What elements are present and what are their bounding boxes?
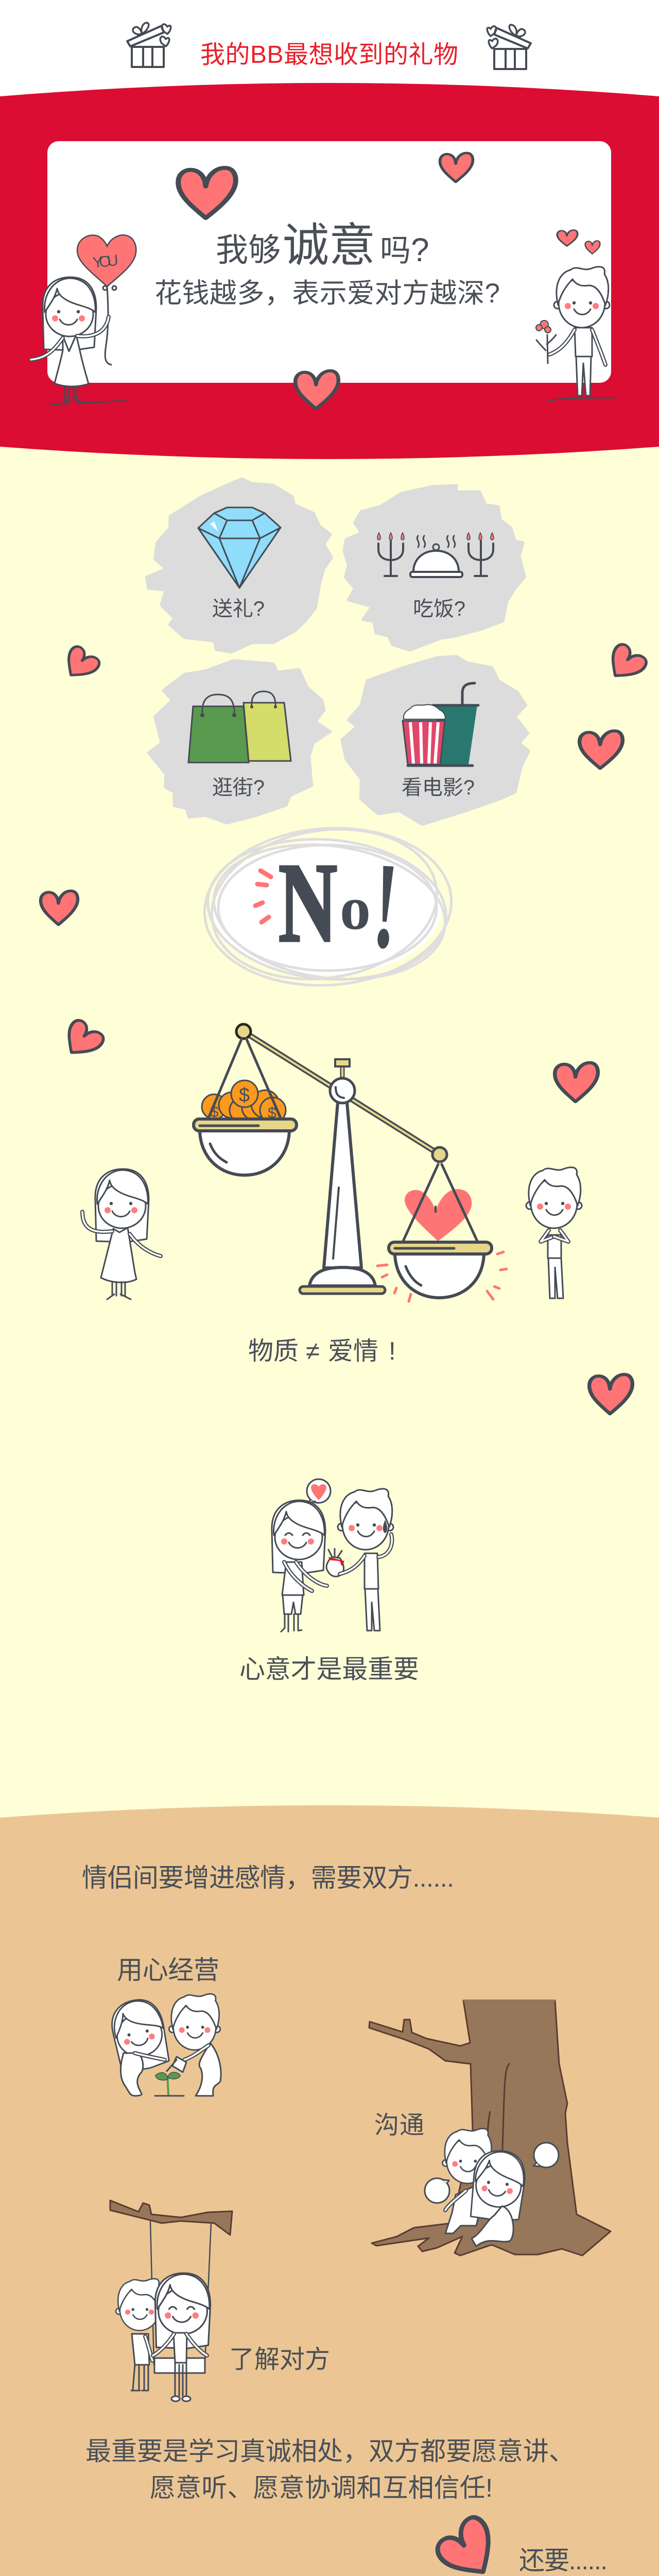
icon: bottom heart: [296, 371, 338, 409]
text: material not equal love: ≠: [306, 1337, 320, 1365]
figure: couple with gift: [272, 1479, 393, 1632]
text: couples need both sides: 情侣间要增进感情，需要双方......: [82, 1863, 454, 1892]
figure: girl with balloon: [31, 235, 136, 405]
label: movie: 看电影?: [402, 776, 475, 799]
label: communicate: 沟通: [374, 2112, 424, 2139]
icon: gift box left: [127, 23, 171, 67]
label: dinner: 吃饭?: [413, 598, 465, 620]
title: 我的BB最想收到的礼物: [200, 41, 458, 69]
figure: waving girl: [82, 1169, 161, 1299]
icon: gift box right: [487, 25, 531, 69]
figure: boy with hands on chest: [526, 1167, 582, 1298]
figure: girl with balloon: YOU: [92, 252, 119, 272]
text: material not equal love: !: [389, 1337, 396, 1365]
chart: balance scale: $: [239, 1084, 250, 1106]
text: the heart matters most: 心意才是最重要: [239, 1655, 419, 1684]
background: tan section: [0, 1805, 659, 2576]
scribbled circle with No!: o: [340, 874, 371, 942]
panel: dinner scribble: [344, 485, 525, 650]
figure: couple watering plant: [107, 1994, 221, 2096]
label: shopping: 逛街?: [212, 776, 265, 799]
scribbled circle with No!: [199, 814, 457, 995]
hero question: 我够: [216, 232, 281, 268]
label: gift: 送礼?: [212, 598, 265, 620]
label: also need: 还要......: [519, 2546, 608, 2575]
hero subtitle: 花钱越多，表示爱对方越深?: [154, 278, 500, 309]
heart on pan: [405, 1189, 472, 1241]
icon: shopping bags: [188, 691, 291, 762]
label: understand each other: 了解对方: [229, 2346, 330, 2374]
icon: heart beside also: [432, 2513, 506, 2576]
text: key message line 2: 愿意听、愿意协调和互相信任!: [150, 2473, 493, 2502]
hero question: 诚意: [283, 220, 375, 272]
background: red header band: [0, 83, 659, 459]
icon: small heart: [440, 153, 473, 182]
side hearts: scale section: [58, 1016, 632, 1414]
icon: big heart: [178, 168, 236, 218]
label: nurture: 用心经营: [117, 1956, 219, 1985]
figure: swing couple: [110, 2200, 232, 2401]
chart: balance scale: [194, 1024, 507, 1301]
side hearts: gift section: [41, 640, 649, 925]
chart: balance scale: $: [210, 1104, 219, 1121]
scribbled circle with No!: !: [369, 836, 402, 975]
icon: popcorn and drink: [403, 683, 478, 766]
panel: gift scribble: [147, 479, 332, 652]
icon: diamond: [198, 507, 281, 588]
text: material not equal love: 物质: [248, 1337, 299, 1365]
text: material not equal love: 爱情: [328, 1337, 378, 1365]
panel: movie scribble: [342, 656, 529, 824]
scribbled circle with No!: N: [279, 840, 337, 965]
hero question: 吗: [380, 233, 411, 268]
icon: candles and dinner: [377, 533, 494, 577]
hero question: ?: [411, 231, 429, 268]
figure: tree with couple: [369, 2001, 611, 2256]
figure: boy with rose: [536, 230, 616, 401]
background: pale yellow section: [0, 412, 659, 1855]
panel: white hero card: [47, 141, 611, 383]
coins: [202, 1080, 286, 1123]
panel: shopping scribble: [149, 660, 331, 823]
chart: balance scale: $: [268, 1105, 276, 1122]
text: key message line 1: 最重要是学习真诚相处，双方都要愿意讲、: [85, 2437, 575, 2466]
